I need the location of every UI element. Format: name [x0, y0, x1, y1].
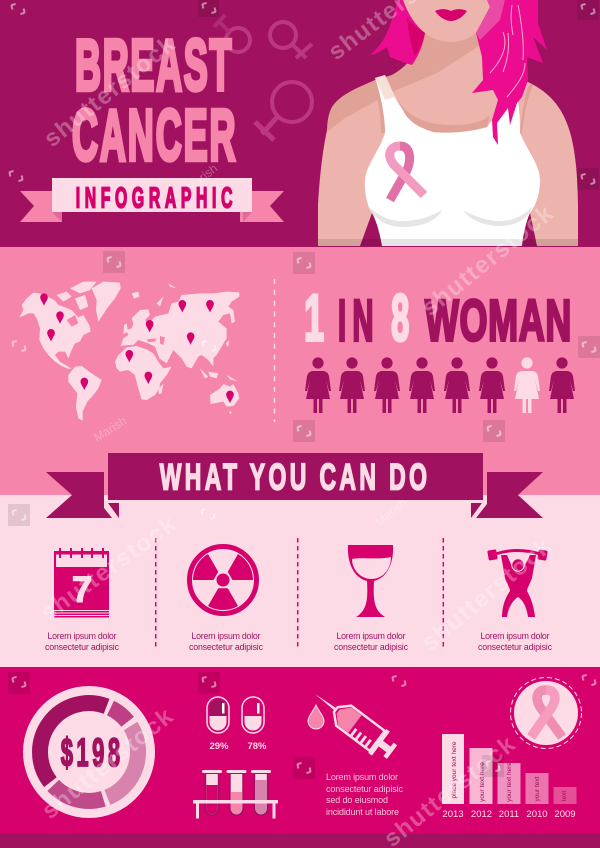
- text: column captions: Lorem ipsum dolor: [480, 631, 550, 641]
- icon: syringe: [306, 682, 401, 764]
- watermarks: shutterstock: [37, 703, 179, 825]
- world map: [19, 282, 239, 421]
- text: syringe caption: Lorem ipsum dolor: [326, 772, 398, 782]
- icon: radiation: [190, 546, 256, 614]
- chart: bars by year: place your text here: [451, 741, 458, 799]
- chart: donut $198: $198: [61, 730, 120, 775]
- icons: female symbols: [214, 15, 312, 140]
- text: syringe caption: incididunt ut labore: [326, 807, 399, 817]
- chart: bars by year: 2012: [471, 809, 492, 820]
- chart: bars by year: [442, 734, 576, 820]
- banner: infographic: INFOGRAPHIC: [76, 181, 233, 213]
- icons: pills with percentages: 29%: [209, 741, 229, 752]
- map pins: [40, 293, 234, 403]
- chart: bars by year: 2013: [442, 809, 464, 820]
- icon: ribbon badge: [510, 678, 582, 748]
- chart: bars by year: your text here: [506, 762, 513, 802]
- watermarks: shutterstock: [36, 511, 181, 627]
- title: CANCER: [72, 95, 236, 176]
- title: BREAST: [75, 25, 232, 106]
- chart: bars by year: 2010: [526, 809, 548, 820]
- icons: pills with percentages: 78%: [247, 741, 267, 752]
- icon: chest awareness ribbon: [390, 146, 424, 200]
- banner: infographic: [20, 178, 284, 222]
- icon: weightlifter: [487, 549, 548, 617]
- heading: 1 in 8 woman: 8: [391, 283, 409, 356]
- icon: calendar: [54, 548, 109, 618]
- text: column captions: consectetur adipisic: [45, 642, 120, 652]
- text: column captions: Lorem ipsum dolor: [336, 631, 406, 641]
- text: column captions: [45, 631, 553, 652]
- text: column captions: consectetur adipisic: [478, 642, 553, 652]
- chart: donut $198: [23, 686, 155, 818]
- chart: bars by year: text: [561, 791, 568, 801]
- banner: what you can do: [46, 453, 543, 518]
- heading: 1 in 8 woman: IN: [338, 288, 374, 353]
- watermarks: Marish: [183, 161, 220, 194]
- column dividers: [156, 538, 443, 649]
- illustration: woman with tank top: [318, 0, 578, 246]
- text: column captions: consectetur adipisic: [189, 642, 264, 652]
- chart: bars by year: 2011: [499, 809, 519, 820]
- chart: bars by year: your text: [534, 776, 541, 801]
- watermarks: Marish: [373, 495, 410, 529]
- icon: test tubes: [193, 770, 278, 818]
- title: [72, 25, 236, 176]
- icon: wine glass: [348, 545, 393, 617]
- watermarks: shutterstock: [417, 200, 559, 322]
- text: column captions: consectetur adipisic: [334, 642, 409, 652]
- chart: bars by year: your text here: [479, 762, 486, 802]
- heading: 1 in 8 woman: [304, 282, 571, 356]
- icon: water drop: [308, 705, 324, 729]
- icon: calendar: 7: [72, 569, 92, 610]
- watermarks: shutterstock: [417, 533, 557, 657]
- banner: what you can do: WHAT YOU CAN DO: [160, 456, 427, 498]
- watermarks: shutterstock: [39, 31, 181, 153]
- text: column captions: Lorem ipsum dolor: [48, 631, 117, 641]
- chart: bars by year: 2009: [554, 809, 576, 820]
- icons: pills with percentages: [207, 697, 267, 752]
- text: column captions: Lorem ipsum dolor: [192, 631, 261, 641]
- text: syringe caption: [326, 772, 404, 817]
- heading: 1 in 8 woman: 1: [304, 282, 324, 356]
- text: syringe caption: sed do eiusmod: [326, 795, 388, 805]
- pictogram: eight women: [305, 357, 575, 413]
- watermarks: Marish: [91, 414, 129, 445]
- heading: 1 in 8 woman: WOMAN: [425, 289, 571, 354]
- text: syringe caption: consectetur adipisic: [326, 784, 404, 794]
